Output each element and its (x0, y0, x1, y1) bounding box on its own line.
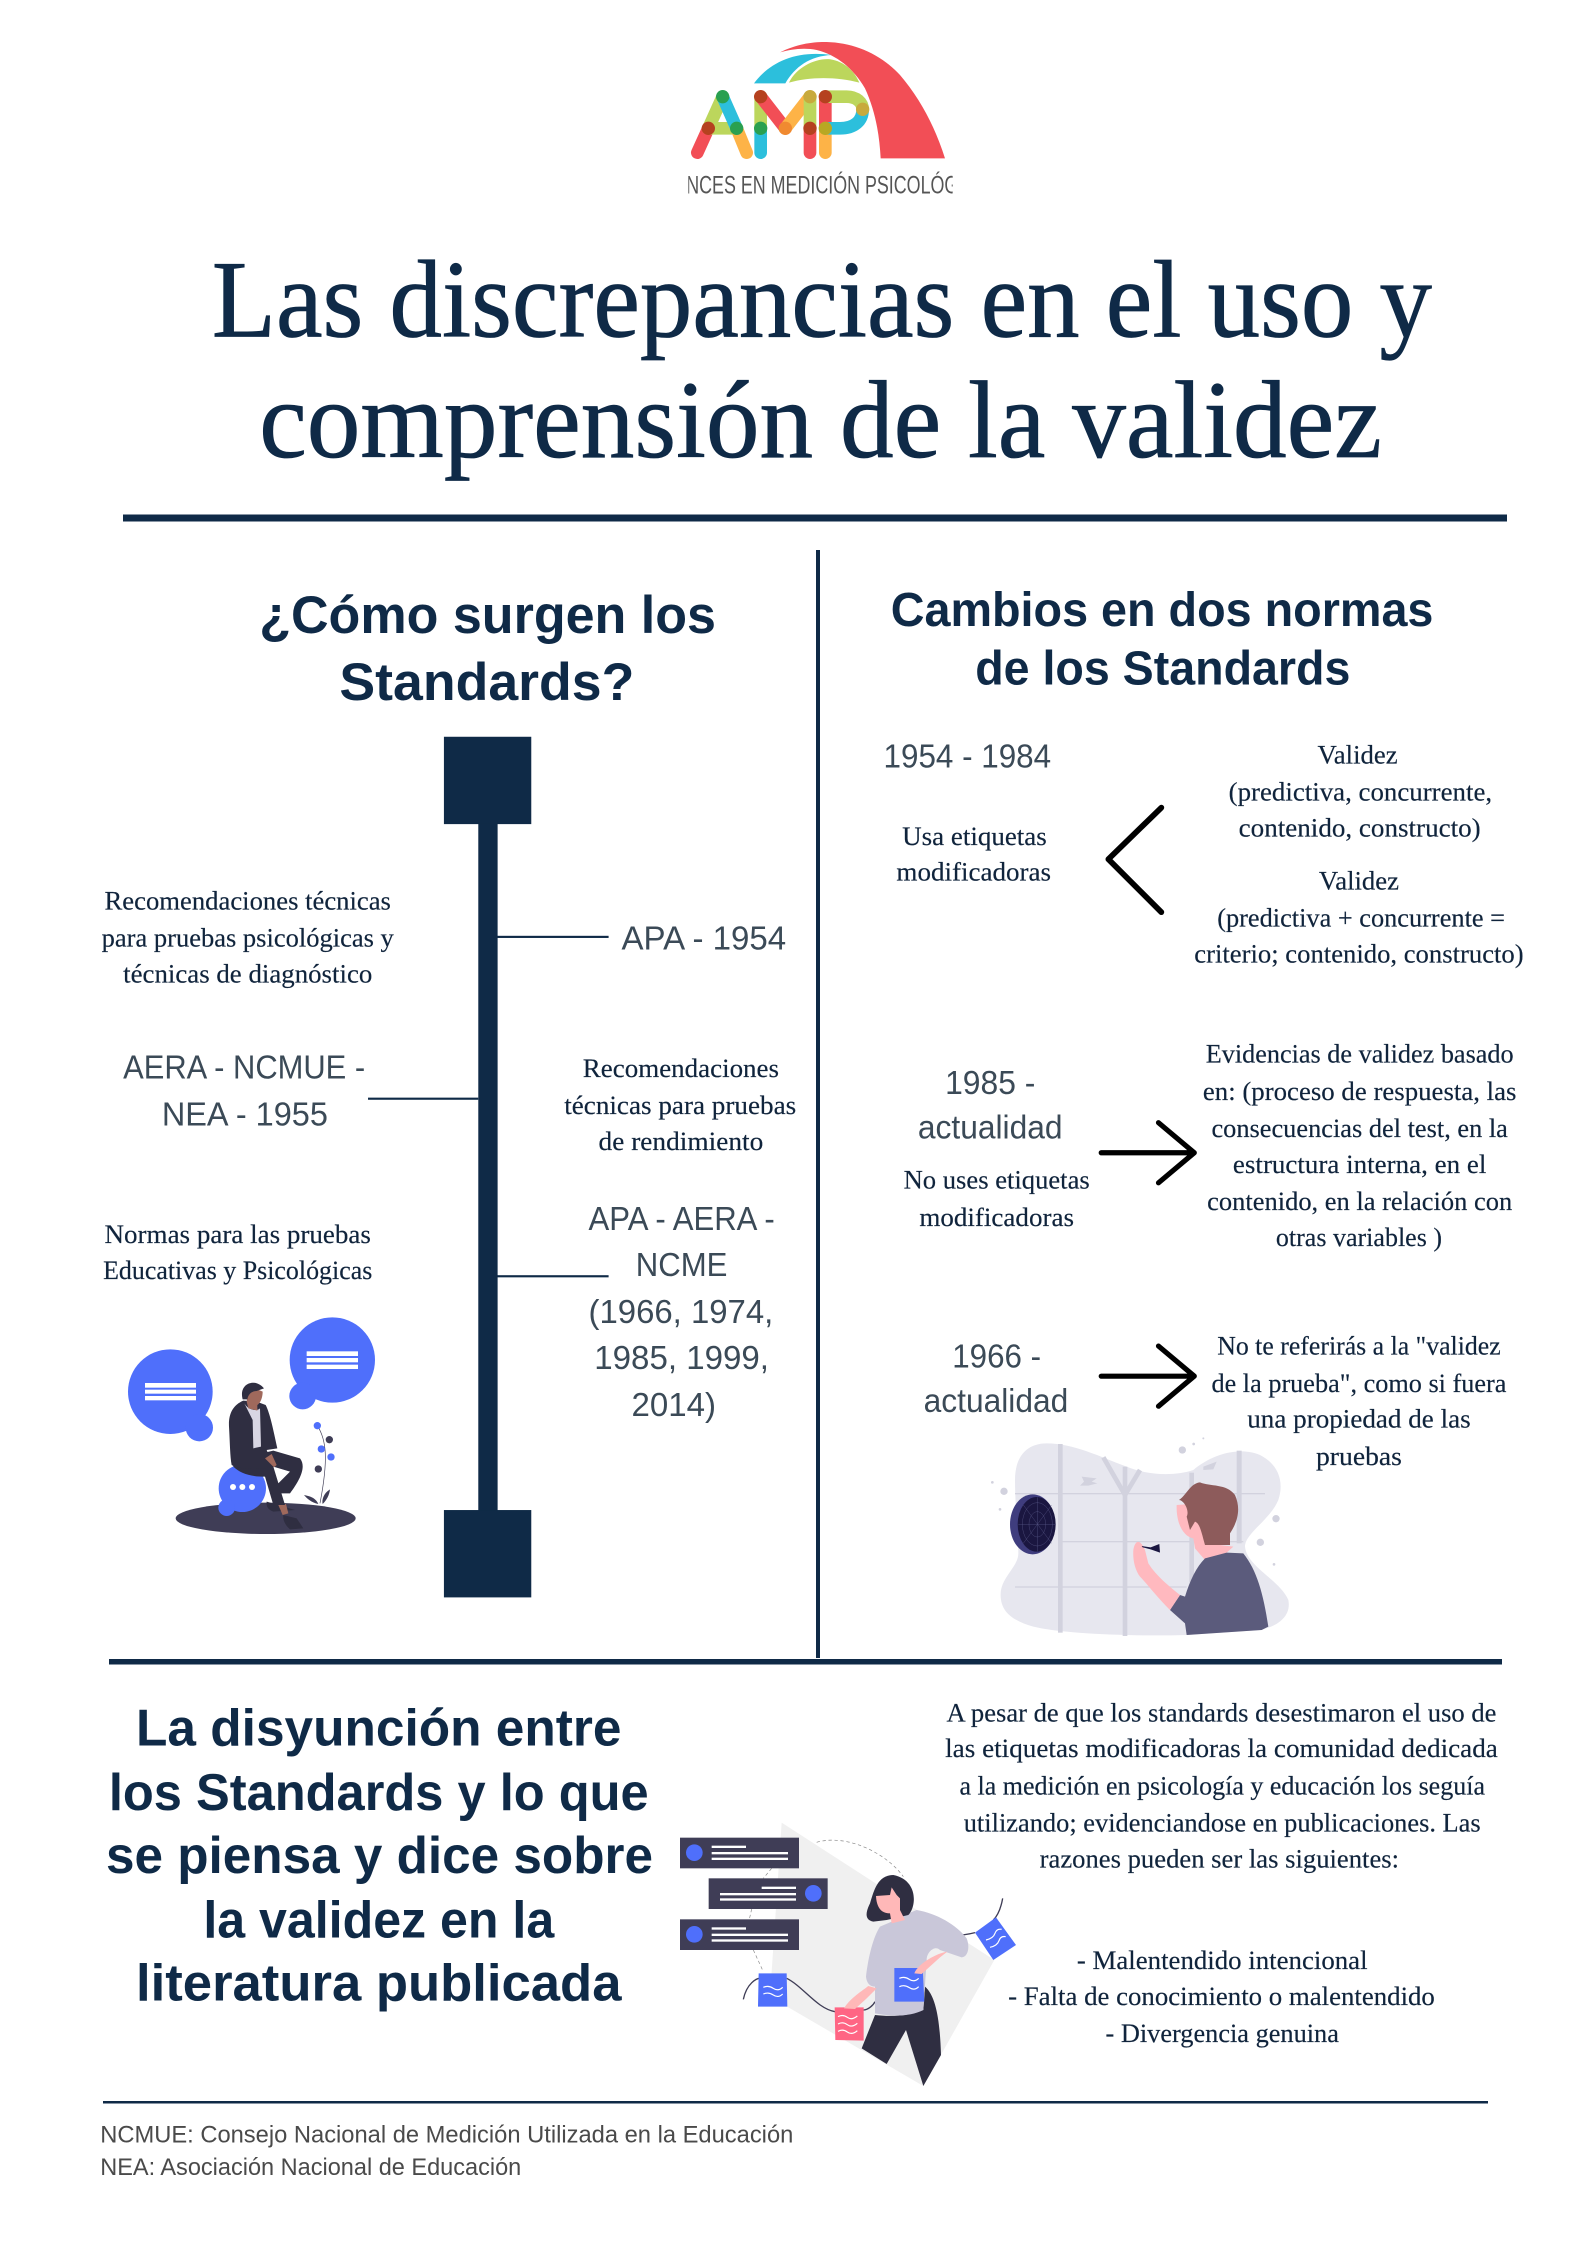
heading: la disyunción: se piensa y dice sobre (106, 1827, 653, 1885)
text: recomendaciones técnicas pruebas psicológicas: técnicas de diagnóstico (123, 958, 372, 988)
heading: la disyunción: literatura publicada (136, 1955, 622, 2013)
label: APA 1954: APA - 1954 (621, 920, 786, 957)
illustration: person with speech bubbles (128, 1317, 375, 1534)
text: evidencias de validez: contenido, en la relación con (1207, 1186, 1512, 1216)
arrow: 1985 (1101, 1123, 1194, 1183)
heading: cómo surgen los Standards (259, 586, 716, 712)
text: usa etiquetas modificadoras: Usa etiquetas (902, 821, 1047, 851)
label: 1985 actualidad (918, 1065, 1063, 1146)
heading: cómo surgen los Standards: ¿Cómo surgen los (259, 586, 716, 645)
label: AERA NCMUE NEA 1955: NEA - 1955 (162, 1097, 328, 1134)
text: validez antes (1229, 739, 1492, 842)
text: evidencias de validez: en: (proceso de respuesta, las (1203, 1076, 1516, 1106)
text: a pesar de que: a la medición en psicología y educación los seguía (959, 1770, 1485, 1800)
title (212, 239, 1432, 481)
text: usa etiquetas modificadoras: modificadoras (896, 857, 1051, 887)
text: a pesar de que (945, 1697, 1498, 1873)
title: Las discrepancias en el uso y (212, 239, 1432, 361)
text: recomendaciones técnicas pruebas psicológicas: Recomendaciones técnicas (105, 885, 391, 915)
heading: cambios en dos normas: Cambios en dos normas (891, 584, 1433, 637)
heading: la disyunción: la validez en la (203, 1891, 555, 1949)
label: APA AERA NCME: NCME (636, 1247, 727, 1284)
text: a pesar de que: las etiquetas modificadoras la comunidad dedicada (945, 1733, 1498, 1763)
label: AERA NCMUE NEA 1955: AERA - NCMUE - (123, 1049, 365, 1086)
footer notes: NEA: Asociación Nacional de Educación (100, 2154, 521, 2181)
illustration: woman with flags (680, 1823, 1016, 2086)
label: 1966 actualidad: actualidad (924, 1383, 1068, 1420)
title: comprensión de la validez (259, 359, 1382, 481)
heading: cambios en dos normas (891, 584, 1433, 695)
label: 1966 actualidad (924, 1339, 1068, 1420)
label: AERA NCMUE NEA 1955 (123, 1049, 365, 1134)
text: no uses etiquetas modificadoras (904, 1165, 1090, 1232)
text: a pesar de que: razones pueden ser las siguientes: (1040, 1843, 1399, 1873)
label: APA AERA NCME: (1966, 1974, (589, 1294, 773, 1331)
heading: cambios en dos normas: de los Standards (975, 642, 1350, 695)
heading: la disyunción: La disyunción entre (136, 1700, 621, 1758)
label: 1985 actualidad: 1985 - (945, 1065, 1035, 1102)
text: a pesar de que: utilizando; evidenciandose en publicaciones. Las (964, 1808, 1481, 1838)
list: razones: - Malentendido intencional (1077, 1945, 1368, 1975)
text: validez después: criterio; contenido, constructo) (1194, 938, 1524, 968)
heading: la disyunción (106, 1700, 653, 2013)
label: APA AERA NCME: 2014) (632, 1387, 716, 1424)
text: validez de la prueba: pruebas (1316, 1441, 1402, 1471)
text: evidencias de validez (1203, 1039, 1516, 1252)
text: validez de la prueba (1211, 1331, 1507, 1471)
label: APA AERA NCME: APA - AERA - (589, 1201, 775, 1238)
list: razones (1008, 1945, 1435, 2048)
text: recomendaciones de rendimiento: de rendimiento (599, 1126, 763, 1156)
text: normas para las pruebas: Normas para las pruebas (105, 1219, 371, 1249)
text: evidencias de validez: consecuencias del test, en la (1211, 1113, 1508, 1143)
text: validez después: (predictiva + concurrente = (1217, 903, 1505, 933)
text: evidencias de validez: estructura interna, en el (1233, 1149, 1486, 1179)
text: validez después: Validez (1319, 865, 1399, 895)
list: razones: - Falta de conocimiento o malentendido (1008, 1981, 1435, 2011)
label: APA AERA NCME: 1985, 1999, (594, 1340, 769, 1377)
text: validez de la prueba: de la prueba", como si fuera (1211, 1368, 1507, 1398)
text: recomendaciones técnicas pruebas psicológicas: para pruebas psicológicas y (102, 923, 395, 953)
text: normas para las pruebas: Educativas y Psicológicas (103, 1255, 372, 1285)
heading: la disyunción: los Standards y lo que (109, 1764, 649, 1822)
footer notes (100, 2121, 793, 2181)
heading: cómo surgen los Standards: Standards? (339, 653, 634, 712)
text: a pesar de que: A pesar de que los standards desestimaron el uso de (947, 1697, 1496, 1727)
text: recomendaciones de rendimiento: Recomendaciones (583, 1053, 779, 1083)
label: 1985 actualidad: actualidad (918, 1109, 1063, 1146)
text: validez de la prueba: una propiedad de las (1247, 1404, 1471, 1434)
text: normas para las pruebas (103, 1219, 372, 1285)
icon: less-than chevron (1108, 808, 1161, 912)
footer notes: NCMUE: Consejo Nacional de Medición Utilizada en la Educación (100, 2121, 793, 2148)
logo: AMP (688, 42, 953, 194)
label: 1954-1984: 1954 - 1984 (884, 739, 1051, 776)
label: 1966 actualidad: 1966 - (952, 1339, 1041, 1376)
text: recomendaciones técnicas pruebas psicológicas (102, 885, 395, 988)
text: validez antes: contenido, constructo) (1239, 812, 1481, 842)
timeline (368, 737, 609, 1597)
logo: AMP: ANCES EN MEDICIÓN PSICOLÓG (674, 170, 958, 199)
text: no uses etiquetas modificadoras: modificadoras (919, 1202, 1074, 1232)
list: razones: - Divergencia genuina (1106, 2018, 1339, 2048)
text: no uses etiquetas modificadoras: No uses etiquetas (904, 1165, 1090, 1195)
illustration: man throwing dart (991, 1437, 1289, 1636)
text: validez después (1194, 865, 1524, 968)
text: evidencias de validez: otras variables ) (1276, 1222, 1442, 1252)
text: validez antes: (predictiva, concurrente, (1229, 776, 1492, 806)
text: validez de la prueba: No te referirás a la "validez (1217, 1331, 1501, 1361)
text: usa etiquetas modificadoras (896, 821, 1051, 887)
text: validez antes: Validez (1317, 739, 1398, 769)
text: recomendaciones de rendimiento (564, 1053, 796, 1156)
text: recomendaciones de rendimiento: técnicas para pruebas (564, 1090, 796, 1120)
arrow: 1966 (1101, 1346, 1194, 1406)
text: evidencias de validez: Evidencias de validez basado (1206, 1039, 1514, 1069)
label: APA AERA NCME (589, 1201, 775, 1424)
